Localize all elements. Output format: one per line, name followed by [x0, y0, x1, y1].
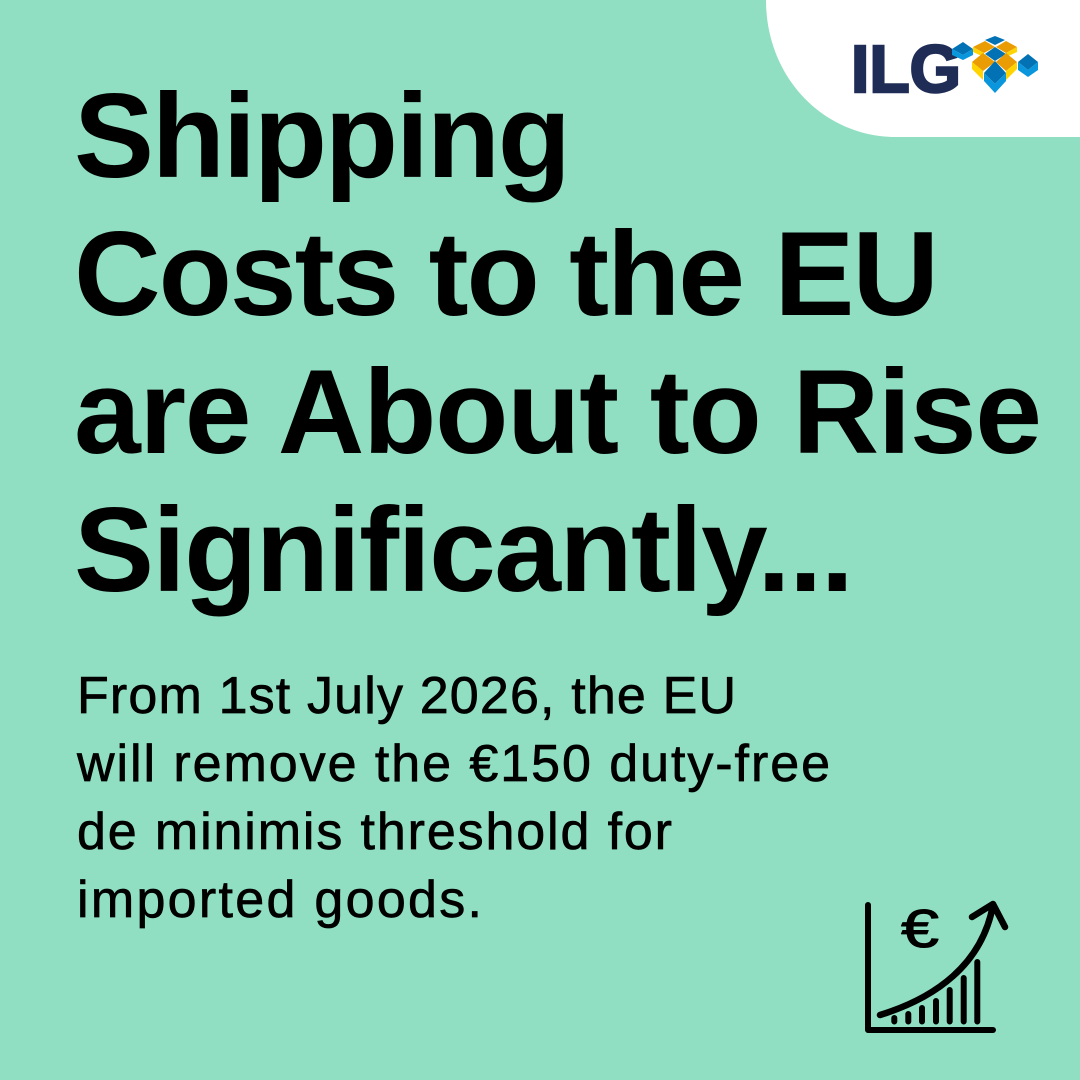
chart axes [868, 905, 993, 1030]
euro symbol: € [901, 899, 939, 959]
title: Shipping [74, 69, 571, 203]
logo panel: white rounded corner [766, 0, 1080, 137]
subheading text: de minimis threshold for [77, 803, 672, 861]
subheading text: From 1st July 2026, the EU [77, 667, 736, 725]
chart bars [894, 962, 977, 1022]
logo wordmark: ILG [851, 32, 961, 107]
rising arrow [880, 904, 1005, 1015]
title: Significantly... [74, 483, 854, 617]
title [74, 69, 1042, 617]
subheading text [76, 667, 830, 929]
subheading text: imported goods. [77, 871, 482, 929]
logo: ILG wordmark and cubes [851, 32, 1038, 107]
subheading text: will remove the €150 duty-free [76, 735, 830, 793]
title: are About to Rise [74, 345, 1042, 479]
title: Costs to the EU [74, 207, 939, 341]
icon: rising euro cost chart [868, 899, 1005, 1030]
logo cubes [952, 36, 1038, 93]
